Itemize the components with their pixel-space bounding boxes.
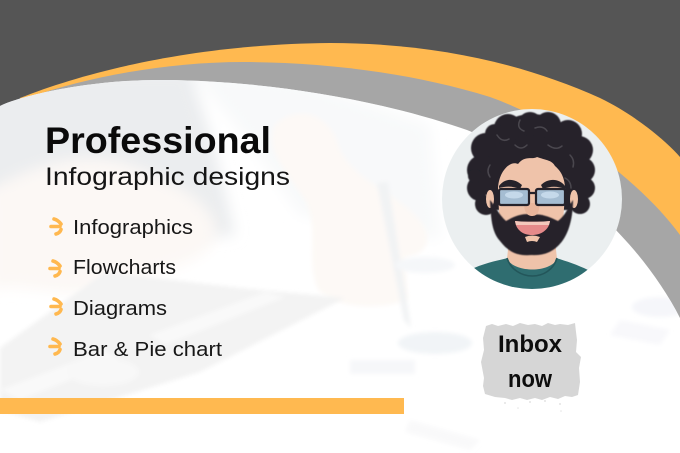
faded photo: tablet: [0, 272, 345, 422]
nose: [524, 203, 539, 216]
glasses: [499, 189, 565, 205]
faded photo: right hand: [314, 224, 422, 304]
inbox now badge: [481, 323, 581, 412]
title: Professional: [45, 120, 271, 161]
hair: [467, 112, 595, 215]
list item: Diagrams: Diagrams: [73, 298, 167, 320]
faded photo: left hand: [0, 158, 216, 293]
shirt collar: [507, 258, 557, 276]
subtitle: Infographic designs: [45, 163, 290, 191]
faded photo: sleeve and shirt: [0, 80, 372, 236]
list item: Infographics: Infographics: [73, 217, 193, 239]
icon: orange bullet: [51, 219, 61, 234]
icon: orange bullet: [50, 339, 60, 354]
beard: [490, 200, 573, 255]
avatar circle background: [442, 109, 622, 289]
orange curved band: [20, 43, 680, 330]
list item: Flowcharts: Flowcharts: [73, 257, 176, 279]
avatar portrait: [442, 109, 622, 295]
shirt: [474, 258, 588, 289]
faded photo: paper charts: [353, 259, 678, 371]
speckles: [504, 400, 562, 412]
text: now: now: [508, 366, 552, 393]
torn paper shape: [481, 323, 581, 400]
grey curved band: [30, 62, 680, 340]
eyebrows: [499, 180, 522, 189]
orange bar: [0, 398, 404, 414]
hair curls: [486, 120, 574, 205]
text: Inbox: Inbox: [498, 331, 563, 358]
ears: [486, 190, 494, 208]
mouth: [515, 221, 550, 235]
icon: orange bullet: [51, 299, 61, 314]
face: [498, 157, 566, 222]
neck: [507, 248, 557, 270]
icon: orange bullet: [50, 261, 60, 276]
chin patch: [525, 236, 540, 242]
list item: Bar & Pie chart: Bar & Pie chart: [73, 339, 222, 361]
faded photo: pen: [380, 188, 409, 322]
